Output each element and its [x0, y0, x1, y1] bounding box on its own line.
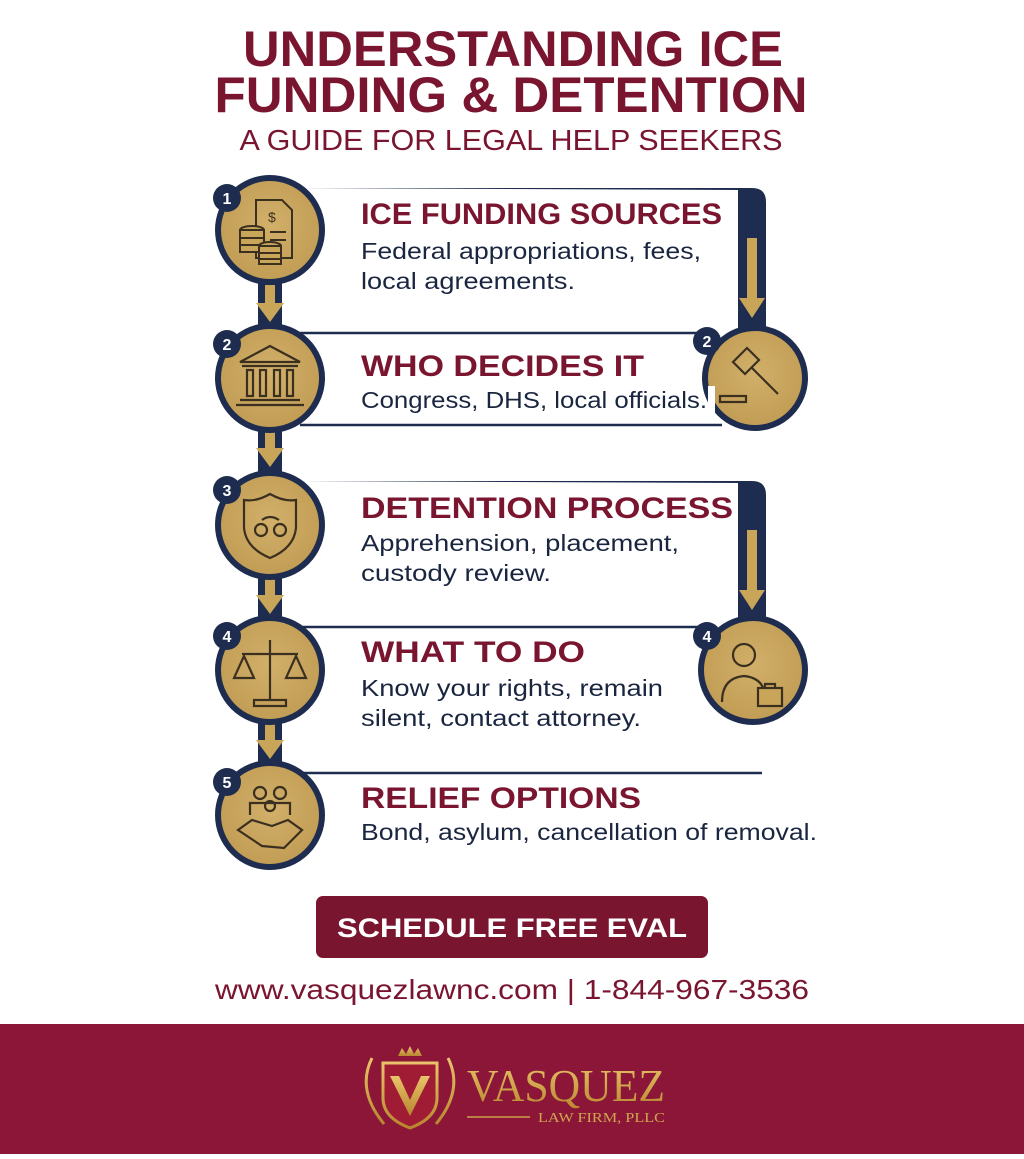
step 2 right icon: gavel: [693, 327, 805, 428]
step 1 icon: money: [213, 178, 322, 282]
step 2 icon: courthouse: 2: [223, 337, 232, 354]
panel 1 text: [361, 198, 722, 294]
step 4 right icon: attorney: [693, 618, 805, 722]
panel 4 text: silent, contact attorney.: [361, 705, 641, 731]
step 1 icon: money: 1: [223, 191, 232, 208]
CTA button: [316, 896, 708, 958]
title: UNDERSTANDING ICE: [243, 21, 783, 77]
panel 3 text: custody review.: [361, 560, 551, 586]
step 3 icon: shield handcuffs: [213, 473, 322, 577]
panel 2 text: WHO DECIDES IT: [361, 350, 644, 383]
step 5 icon: family handshake: [213, 763, 322, 867]
step 4 icon: scales: [213, 618, 322, 722]
step 3 icon: shield handcuffs: 3: [223, 483, 232, 500]
panel 3 text: Apprehension, placement,: [361, 530, 679, 556]
logo: LAW FIRM, PLLC: [538, 1111, 665, 1126]
logo: [366, 1046, 665, 1128]
step 2 right icon: gavel: 2: [703, 334, 712, 351]
subtitle: A GUIDE FOR LEGAL HELP SEEKERS: [240, 125, 782, 157]
panel 1 text: ICE FUNDING SOURCES: [361, 198, 722, 231]
panel 4 text: WHAT TO DO: [361, 636, 585, 669]
flow connectors: [256, 188, 766, 790]
step 2 icon: courthouse: [213, 326, 322, 430]
step 4 icon: scales: 4: [223, 629, 232, 646]
step 1 icon: money: $: [268, 209, 276, 225]
step 5 icon: family handshake: 5: [223, 775, 232, 792]
panel 1 text: local agreements.: [361, 268, 575, 294]
CTA button: SCHEDULE FREE EVAL: [337, 913, 687, 943]
panel 5 text: [361, 782, 817, 845]
panel 4 text: [361, 636, 663, 731]
panel 5 text: Bond, asylum, cancellation of removal.: [361, 819, 817, 845]
contact line: www.vasquezlawnc.com | 1-844-967-3536: [214, 974, 809, 1005]
panel 2 text: [356, 350, 711, 414]
panel 4 text: Know your rights, remain: [361, 675, 663, 701]
panel 1 text: Federal appropriations, fees,: [361, 238, 701, 264]
panel 2 text: Congress, DHS, local officials.: [361, 387, 707, 413]
step 4 right icon: attorney: 4: [703, 629, 712, 646]
title: FUNDING & DETENTION: [214, 67, 808, 123]
title: [214, 21, 808, 123]
panel 3 text: DETENTION PROCESS: [361, 492, 733, 525]
footer band: [0, 1024, 1024, 1154]
panel 3 text: [361, 492, 733, 586]
logo: VASQUEZ: [467, 1060, 665, 1111]
panel 5 text: RELIEF OPTIONS: [361, 782, 641, 815]
